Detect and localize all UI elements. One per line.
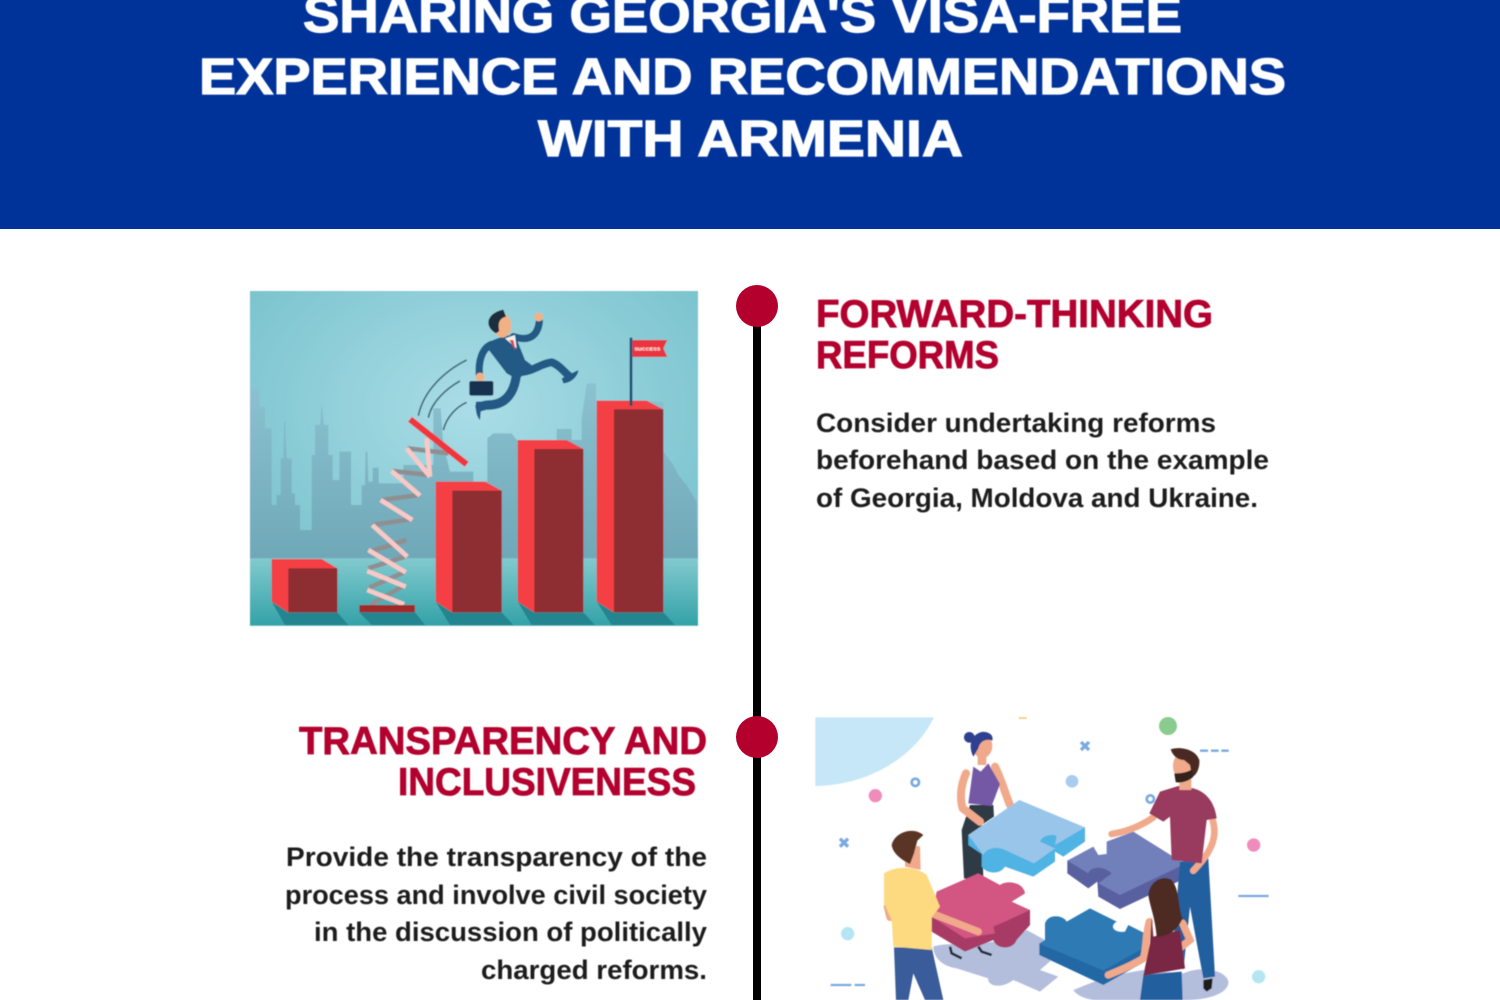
spring plate [410,419,467,464]
puzzle piece: dark blue [1039,908,1145,985]
panel: transparency and inclusiveness [285,720,707,985]
spring [367,438,448,604]
heading: forward-thinking reforms [816,293,1213,377]
flag: SUCCESS [634,347,661,353]
text: forward-thinking reforms body: beforehand based on the example [816,445,1269,475]
bar 4 [597,401,663,612]
illustration: team assembling puzzle [815,717,1269,1000]
woman with long hair [1108,878,1190,1000]
header banner [0,0,1500,229]
man in yellow [884,831,978,1000]
text: transparency body [285,842,707,985]
puzzle piece: pink [932,873,1030,952]
bar 2 [436,482,502,612]
text: transparency body: Provide the transparency of the [286,842,707,872]
puzzle shadow [933,930,1228,1000]
bar 1 [272,559,337,612]
bearded man [1112,748,1217,992]
text: transparency body: charged reforms. [481,955,707,985]
flag [630,338,667,406]
illustration: businessman leaping up red bars [250,291,698,626]
woman in purple [961,732,1010,883]
businessman [469,310,578,420]
bar 3 [518,440,583,612]
black shoes [950,947,992,958]
title [199,0,1286,167]
text: transparency body: process and involve civil society [285,880,707,910]
title: WITH ARMENIA [538,110,963,167]
text: transparency body: in the discussion of politically [314,917,707,947]
heading: forward-thinking reforms: FORWARD-THINKING [816,293,1213,336]
motion lines [418,360,467,430]
timeline [736,285,778,1000]
heading: transparency and inclusiveness: INCLUSIVENESS [398,761,696,804]
text: forward-thinking reforms body: Consider undertaking reforms [816,408,1216,438]
puzzle piece: purple [1067,832,1185,909]
puzzle piece: light blue [968,800,1085,877]
text: forward-thinking reforms body: of Georgia, Moldova and Ukraine. [816,483,1258,513]
heading: transparency and inclusiveness: TRANSPARENCY AND [299,720,707,763]
decorative shapes [815,717,1269,985]
timeline marker 1 [736,285,778,327]
panel: forward-thinking reforms [816,293,1269,513]
title: EXPERIENCE AND RECOMMENDATIONS [199,48,1286,105]
text: forward-thinking reforms body [816,408,1269,513]
heading: transparency and inclusiveness [299,720,707,804]
timeline marker 2 [736,716,778,758]
heading: forward-thinking reforms: REFORMS [816,334,999,377]
